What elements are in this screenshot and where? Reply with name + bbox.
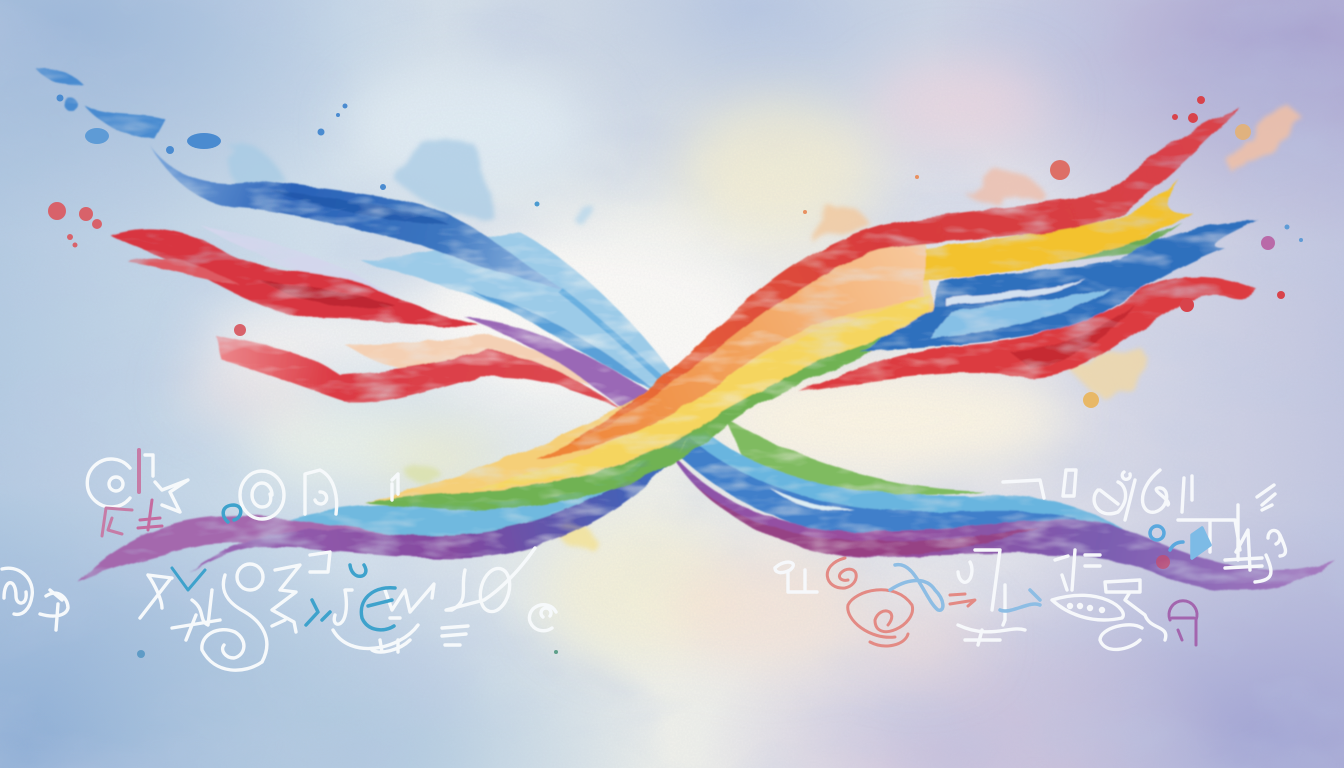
white hand-drawn symbols right [775,470,1285,649]
white hand-drawn symbols left [2,455,556,670]
mid blue strand [470,290,652,388]
green strand right [1060,222,1182,262]
light blue strand lower right [685,425,1122,533]
magenta core lower right [690,480,1040,557]
light blue symbols right [890,565,1040,611]
sky blue fan [362,232,672,392]
pale peach strand [345,335,590,385]
pale streak lower right [770,488,855,511]
band underlay [365,240,935,505]
lavender strand lower left [78,516,385,582]
ribbon: upper-left strands [35,67,672,410]
green strand lower right [725,418,985,495]
light blue strand lower left [270,422,695,539]
green band [365,336,890,511]
lower red strand [215,335,622,410]
paint blooms behind the ribbons [222,108,1303,550]
purple strand lower right [668,448,1335,591]
ribbon: rainbow band from upper right [365,108,1258,511]
orange band [535,240,925,458]
top blue strand [150,145,565,290]
purple symbol right [1169,601,1197,645]
red bottom strand [798,277,1258,392]
dark blue core [270,190,450,225]
symbols: left group [2,450,556,670]
red top strand [560,108,1240,448]
upper red strand [110,229,482,326]
pale lavender wash [200,225,400,300]
coral symbols right [827,558,975,646]
paint splatter dots [48,94,1303,658]
red tendril [128,258,240,285]
white streak right [945,278,1085,305]
yellow strand right [915,178,1192,282]
purple strand [465,318,648,410]
pink symbols left [102,450,162,536]
dark red core right [1010,305,1135,368]
blue symbols left [172,505,395,630]
dark red core [260,280,395,308]
symbols: right group [775,470,1285,649]
blue strands right [860,220,1258,352]
blue symbols right [1150,526,1210,558]
yellow band [468,296,930,490]
purple strand lower left [190,428,695,573]
ribbon: lower cool strands [78,418,1335,591]
light blue wash right [930,288,1110,338]
blue strand lower right [678,438,1078,546]
blue arm and spray [35,67,166,140]
